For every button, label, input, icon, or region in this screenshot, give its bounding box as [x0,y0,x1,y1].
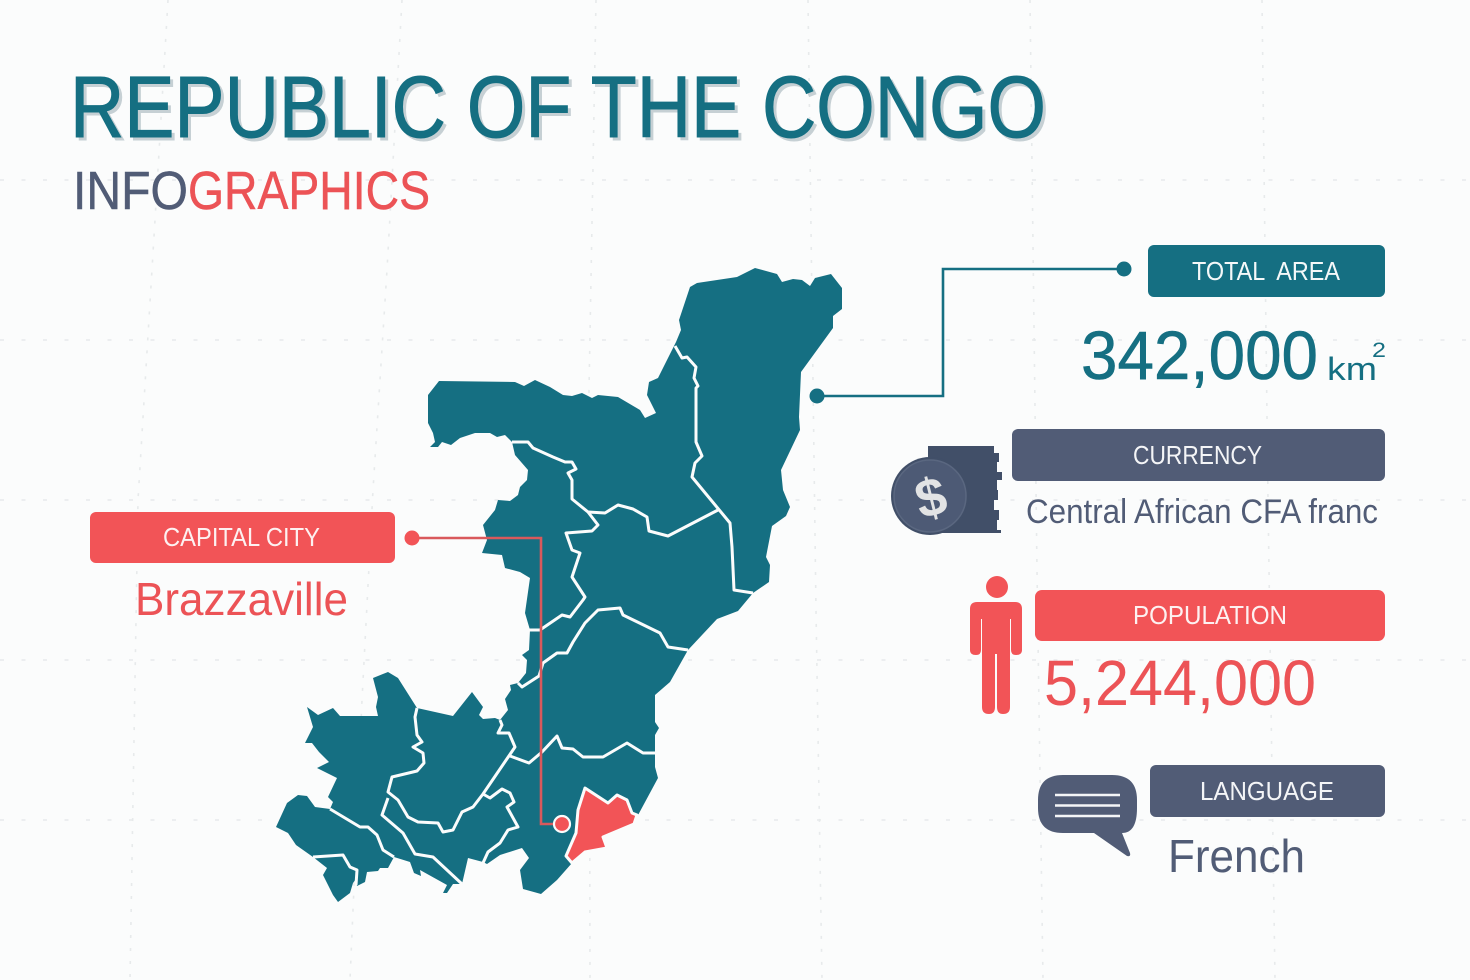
capital city label [90,512,395,563]
language label [1150,765,1385,817]
subtitle [73,161,430,221]
icon: coins: $ [909,465,953,531]
language label: LANGUAGE [1200,776,1334,806]
icon: person [970,576,1022,714]
capital city value: Brazzaville [135,573,348,625]
map: Republic of the Congo [276,268,842,902]
icon: coins [891,446,1002,535]
connector: total area [810,262,1132,404]
capital city label: CAPITAL CITY [163,522,320,552]
total area label [1148,245,1385,297]
total area value: 2 [1372,339,1386,362]
subtitle: INFO [73,161,188,221]
connector: capital city [404,530,570,832]
total area value: km [1327,351,1377,387]
currency label: CURRENCY [1133,440,1262,470]
currency value: Central African CFA franc [1026,493,1378,531]
subtitle: GRAPHICS [188,161,430,221]
panel: currency [891,429,1385,535]
total area label: TOTAL AREA [1192,256,1341,286]
map landmass [276,268,842,902]
panel: language [1038,765,1385,882]
currency label [1012,429,1385,481]
panel: population [970,576,1385,719]
population label: POPULATION [1133,600,1287,630]
total area value: 342,000 [1081,317,1318,394]
panel: capital city [90,512,395,625]
icon: speech bubble [1038,775,1137,856]
language value: French [1168,830,1305,882]
population value: 5,244,000 [1044,647,1316,719]
population label [1035,590,1385,641]
title: REPUBLIC OF THE CONGO [73,62,1049,159]
panel: total area [1081,245,1386,394]
highlighted capital region [566,788,637,863]
title: REPUBLIC OF THE CONGO [70,59,1046,156]
